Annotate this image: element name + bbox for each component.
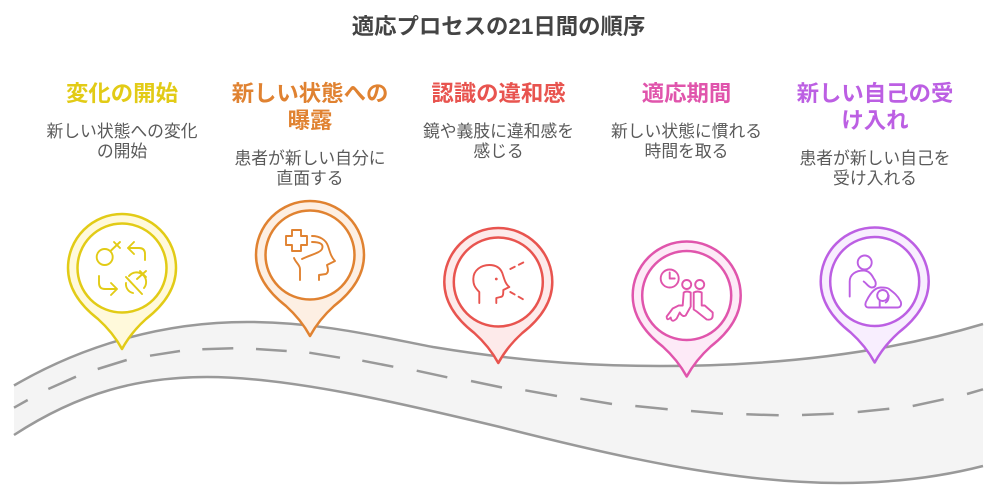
step 5 heading: け入れ [841,108,909,133]
step 2 heading: 新しい状態への [232,81,388,106]
pin 2: head and medical cross icon [256,201,364,336]
step 4 heading: 適応期間 [642,81,731,106]
step 1 description [46,122,198,161]
step 5 description: 受け入れる [833,169,917,188]
step 4 description [611,122,762,161]
step 1 description: の開始 [97,142,147,161]
step 2 description [234,149,386,188]
road [14,322,983,483]
step 3 heading: 認識の違和感 [431,81,566,106]
step 1 heading: 変化の開始 [66,81,179,106]
step 5 heading: 新しい自己の受 [797,81,953,106]
step 2 heading: 曝露 [288,108,332,133]
step 4 description: 時間を取る [645,142,728,161]
step 4 description: 新しい状態に慣れる [611,122,762,141]
pin 3: face looking at mirror icon [444,228,552,363]
step 2 heading [232,81,388,133]
pin 1: gender change icon [68,214,176,349]
step 1 description: 新しい状態への変化 [46,122,198,141]
step 3 description: 鏡や義肢に違和感を [423,122,574,141]
title: 適応プロセスの21日間の順序 [352,14,645,39]
step 2 description: 直面する [276,169,344,188]
step 3 description: 感じる [473,142,524,161]
step 5 description [799,149,951,188]
step 5 heading [797,81,953,133]
pin 4: clock and seated people icon [633,242,741,376]
step 5 description: 患者が新しい自己を [799,149,951,168]
pin 5: caregiver and baby icon [821,228,929,362]
step 3 description [423,122,574,161]
step 2 description: 患者が新しい自分に [234,149,386,168]
